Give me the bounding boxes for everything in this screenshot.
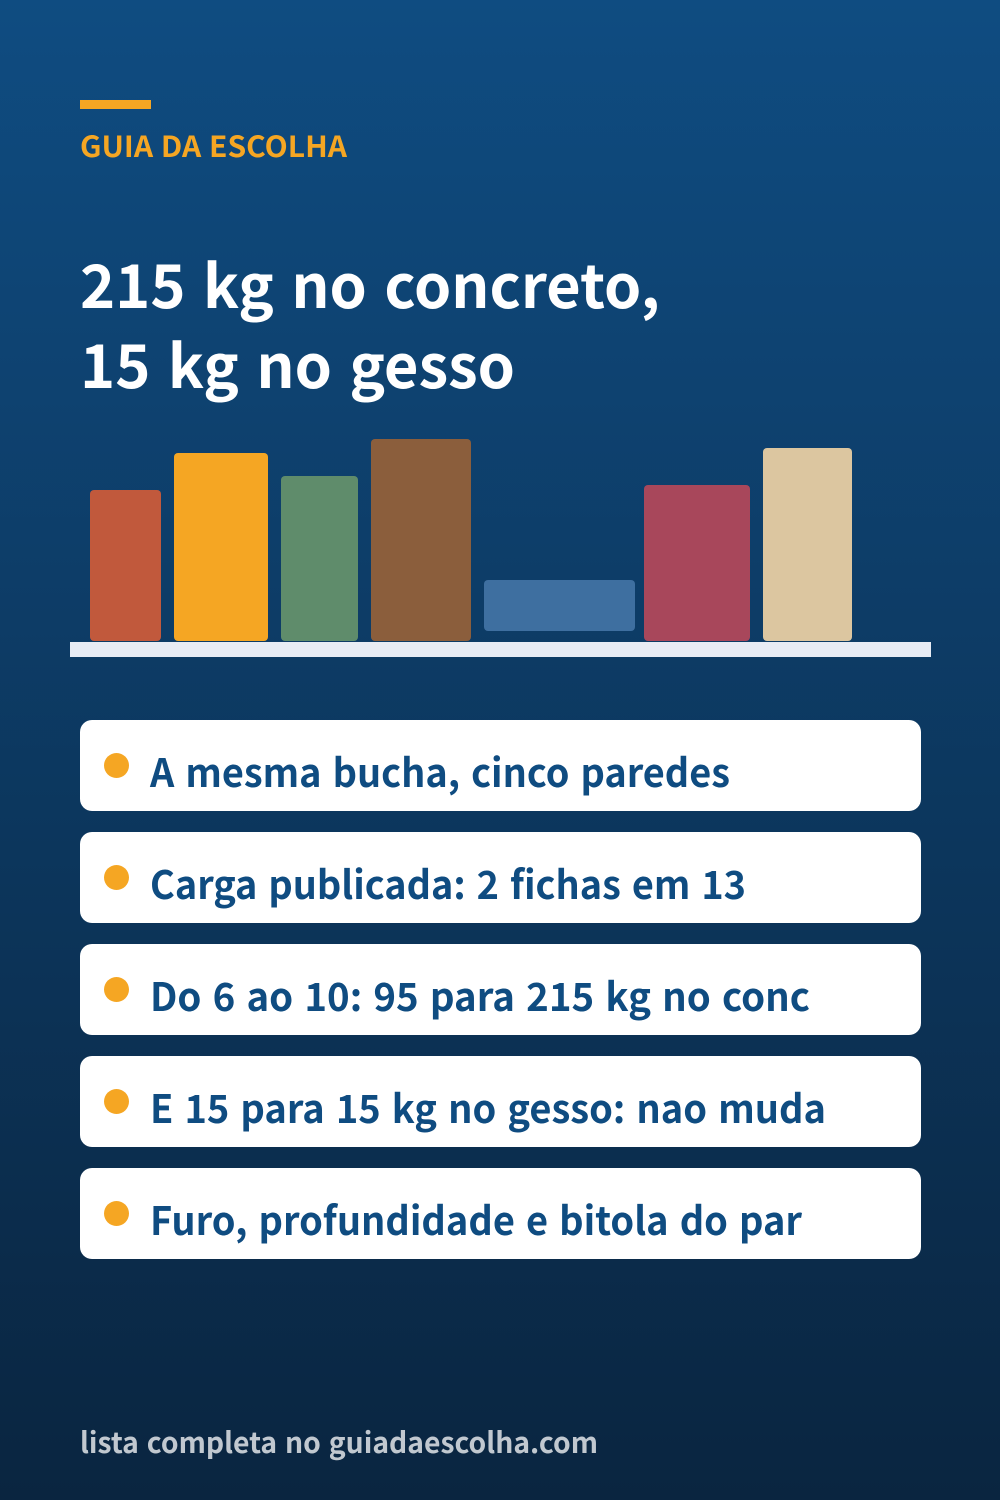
card: drywall unchanged: E 15 para 15 kg no gesso: nao muda [150, 1079, 826, 1135]
card: published load: Carga publicada: 2 fichas em 13 [150, 855, 746, 911]
card: drywall unchanged [80, 1056, 921, 1147]
card: same anchor, five walls: A mesma bucha, cinco paredes [149, 743, 730, 799]
title: 15 kg no gesso [80, 319, 515, 406]
title [80, 239, 660, 406]
card: same anchor, five walls [80, 720, 921, 811]
title: 215 kg no concreto, [80, 239, 660, 326]
card: published load [80, 832, 921, 923]
card: hole, depth and gauge: Furo, profundidade e bitola do par [150, 1191, 803, 1247]
card: hole, depth and gauge [80, 1168, 921, 1259]
accent bar [80, 100, 151, 109]
eyebrow label: GUIA DA ESCOLHA [80, 124, 347, 166]
chart: shelf with anchor bars [70, 439, 931, 657]
footer: lista completa no guiadaescolha.com [80, 1420, 598, 1462]
card: size 6 to 10 [80, 944, 921, 1035]
card: size 6 to 10: Do 6 ao 10: 95 para 215 kg no conc [150, 967, 810, 1023]
